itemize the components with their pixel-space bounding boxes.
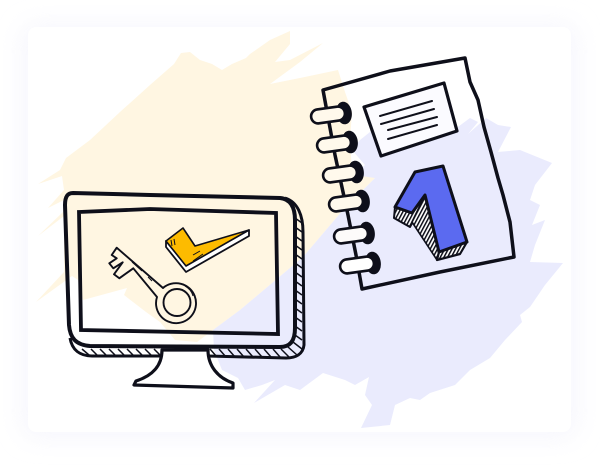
monitor back edge bbox=[70, 198, 304, 358]
brush stroke: yellow bbox=[36, 31, 375, 342]
check mark marks bbox=[171, 239, 203, 261]
monitor bezel bbox=[65, 193, 295, 347]
number 1 inner depth bbox=[412, 195, 439, 260]
number 1 left depth bbox=[394, 195, 425, 227]
key body bbox=[109, 248, 196, 323]
key hole bbox=[164, 289, 190, 316]
notebook rings bbox=[310, 102, 381, 274]
notebook page bbox=[323, 58, 514, 289]
key bbox=[109, 248, 196, 323]
monitor bbox=[65, 193, 304, 388]
notebook bbox=[310, 58, 514, 289]
monitor stand bbox=[134, 350, 233, 388]
monitor hatching bbox=[82, 218, 302, 357]
brush stroke: blue bbox=[213, 118, 563, 428]
check mark bbox=[166, 228, 249, 272]
key highlights bbox=[132, 262, 193, 296]
notebook label lines bbox=[380, 101, 437, 139]
panel: white card bbox=[28, 27, 571, 432]
number 1 bbox=[394, 166, 467, 260]
check mark face bbox=[166, 228, 249, 266]
monitor screen bbox=[79, 209, 278, 334]
number 1 lower depth bbox=[437, 242, 467, 260]
notebook label bbox=[364, 83, 457, 156]
check mark side bbox=[166, 230, 249, 272]
number 1 face bbox=[395, 166, 467, 252]
